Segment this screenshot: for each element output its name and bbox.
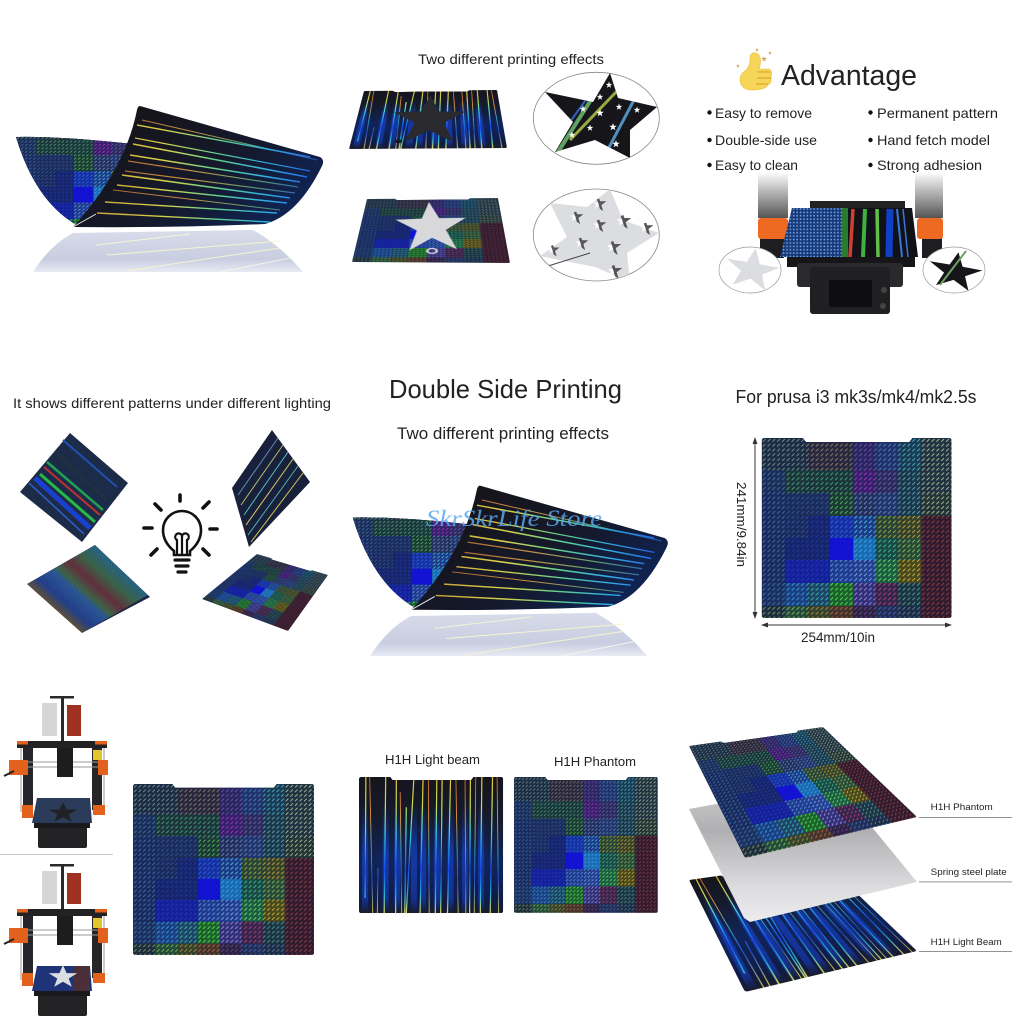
printer: white star print xyxy=(4,864,108,1016)
arrow: height xyxy=(752,437,758,619)
panel: two printing effects xyxy=(418,51,659,282)
zoom circle: black star xyxy=(923,247,985,293)
callout: spring steel plate xyxy=(919,867,1012,882)
callout: H1H light beam xyxy=(919,937,1012,952)
plate: light beam xyxy=(359,777,503,913)
icon: light bulb xyxy=(144,495,217,572)
phantom plate xyxy=(762,438,952,618)
height label: 241mm/9.84in xyxy=(734,482,749,567)
icon: thumbs up xyxy=(736,48,772,90)
label: H1H phantom: H1H Phantom xyxy=(554,754,636,769)
panel: phantom plate large xyxy=(133,784,314,955)
plate on printer bed xyxy=(780,208,918,257)
callout: H1H light beam: H1H Light Beam xyxy=(931,937,1002,948)
plate: top left beam xyxy=(20,433,128,542)
curved plate photo xyxy=(353,486,668,656)
advantage list: Easy to remove xyxy=(715,105,812,121)
callout: H1H phantom: H1H Phantom xyxy=(931,802,993,813)
plate: light beam with black star xyxy=(349,90,507,149)
panel: advantage xyxy=(707,48,998,314)
divider between printers xyxy=(0,854,113,855)
plate: bottom right phantom under lighting xyxy=(202,554,328,631)
plate: phantom xyxy=(514,777,658,913)
arrow: width xyxy=(761,622,952,628)
advantage list: Hand fetch model xyxy=(877,132,990,148)
heading: advantage: Advantage xyxy=(781,60,917,92)
zoom circle: black star xyxy=(533,72,659,164)
advantage list: Double-side use xyxy=(715,132,817,148)
layer: phantom plate xyxy=(689,727,916,858)
store watermark: SkrSkrLife Store xyxy=(426,506,602,531)
heading: double side printing: Double Side Printing xyxy=(389,374,622,404)
caption: lighting: It shows different patterns under different lighting xyxy=(13,395,331,411)
layer: light beam plate xyxy=(689,876,916,992)
advantage list xyxy=(707,105,998,173)
panel: plate size xyxy=(734,387,976,645)
panel: plate comparison xyxy=(359,752,658,913)
panel: exploded layers xyxy=(689,727,1012,992)
subheading: two different printing effects: Two different printing effects xyxy=(397,424,609,443)
panel: double side printing xyxy=(353,374,668,656)
panel: printers with plates xyxy=(0,696,113,1016)
zoom circle: white star xyxy=(533,189,659,282)
advantage list: Permanent pattern xyxy=(877,105,998,121)
plate: top right beam xyxy=(232,430,310,547)
advantage list: Easy to clean xyxy=(715,157,798,173)
advantage list: Strong adhesion xyxy=(877,157,982,173)
printer with plate xyxy=(758,172,943,314)
plate: bottom left phantom xyxy=(27,545,150,633)
label: H1H light beam: H1H Light beam xyxy=(385,752,480,767)
callout: H1H phantom xyxy=(919,802,1012,818)
panel: different patterns under lighting xyxy=(13,395,331,633)
printer: black star print xyxy=(4,696,108,848)
width label: 254mm/10in xyxy=(801,630,875,645)
plate: phantom with white star xyxy=(352,198,510,263)
heading: compatible printers: For prusa i3 mk3s/mk4/mk2.5s xyxy=(736,387,976,407)
panel: curved plate photo xyxy=(16,106,323,272)
heading: two different printing effects: Two different printing effects xyxy=(418,51,604,67)
zoom circle: white star xyxy=(719,244,782,293)
callout: spring steel plate: Spring steel plate xyxy=(931,867,1007,878)
